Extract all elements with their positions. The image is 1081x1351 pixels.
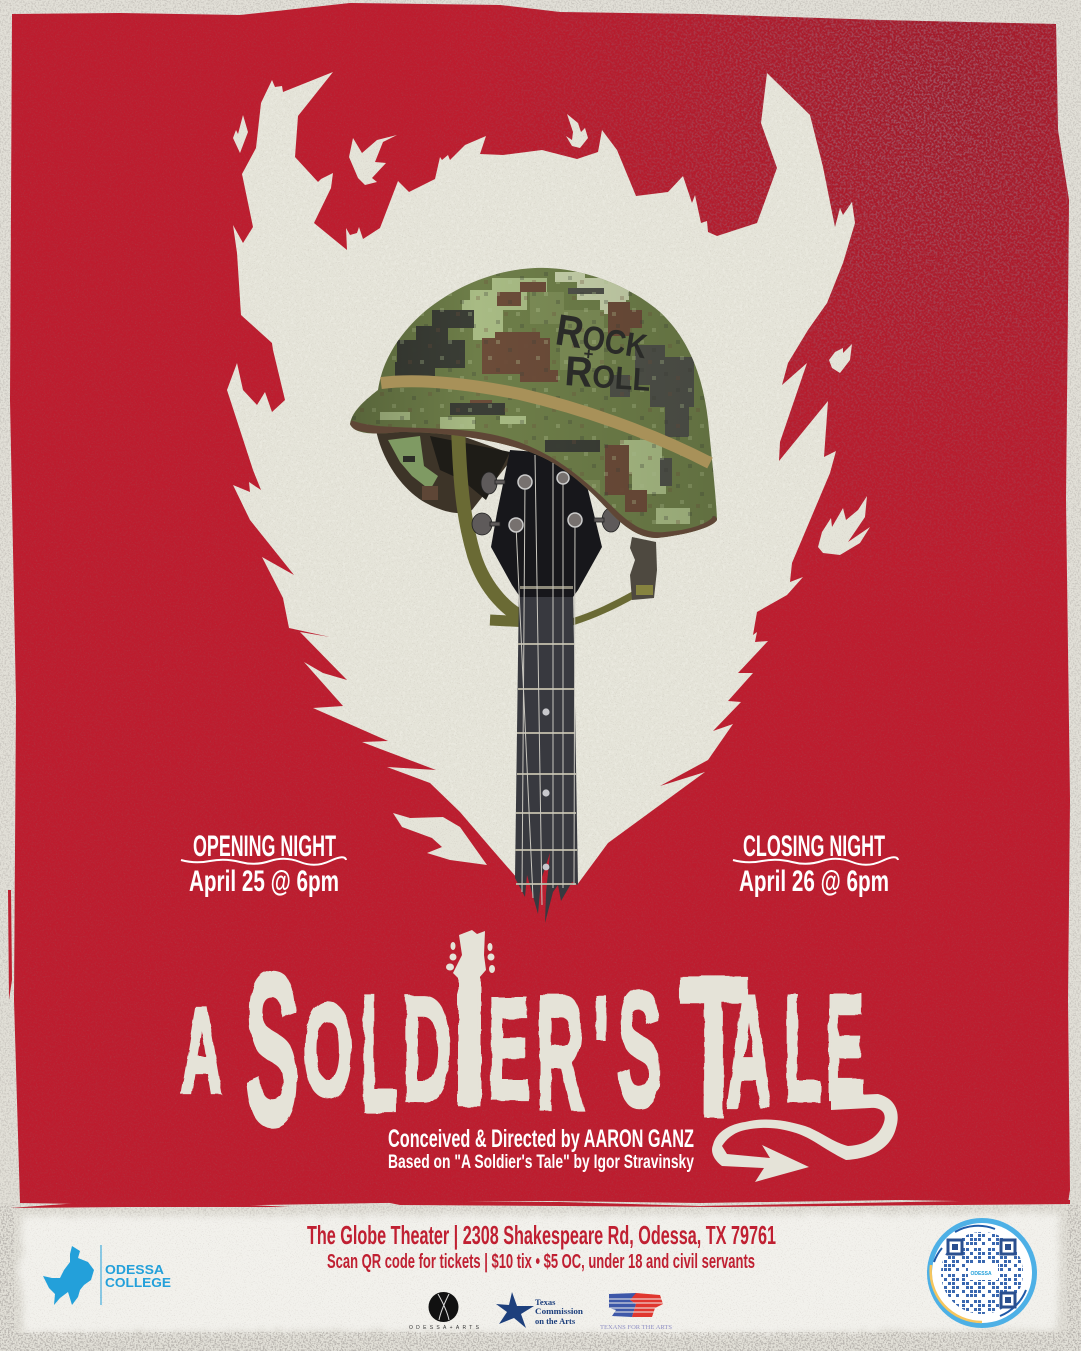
title [181,929,864,1169]
helmet shell [350,268,717,538]
helmet rim [350,424,717,536]
title: L [784,965,820,1133]
logo: Texas Commission on the Arts: Commission [535,1306,583,1316]
navy ring segments [934,1226,1026,1316]
opening night block: April 25 @ 6pm [189,865,339,898]
footer right wear [1067,1205,1081,1335]
title: I [451,941,488,1144]
title: D [402,968,452,1132]
closing night block: April 26 @ 6pm [739,865,889,898]
logo: Odessa College: ODESSA [105,1262,165,1277]
logo: Texas Commission on the Arts: on the Arts [535,1316,576,1326]
QR centre text: ODESSA [970,1271,992,1277]
footer bottom wear [0,1332,1081,1351]
gold ring segment [931,1265,982,1322]
QR finder squares [948,1240,1015,1307]
logo: Texans for the Arts: TEXANS FOR THE ARTS [600,1324,672,1331]
QR centre logo [968,1264,998,1280]
credits [388,1125,694,1173]
frets [515,643,577,885]
headstock nut [520,586,573,589]
title: A [726,963,772,1140]
tuning pegs [472,472,620,535]
credits: Based on "A Soldier's Tale" by Igor Stravinsky [388,1152,694,1173]
venue details [307,1220,776,1273]
logo: Texas Commission on the Arts: Texas [535,1297,556,1307]
title: E [826,964,864,1130]
logo: Texans for the Arts [600,1293,672,1331]
logo: Texas Commission on the Arts [496,1292,583,1328]
helmet [350,268,717,538]
red field shading [645,14,1069,396]
title: O [304,978,352,1123]
camouflage pattern [350,272,717,538]
guitar [472,450,620,923]
flame shaped paper burst [227,72,870,885]
title: E [488,970,530,1129]
logo: Odessa College [43,1245,171,1305]
helmet underside [376,428,515,513]
red field grunge [476,5,1069,564]
Rock and Roll marking: ROLL [563,347,652,400]
tuner posts [509,472,582,532]
title: ' [594,964,608,1142]
logo: Odessa Arts: ODESSA+ARTS [409,1325,480,1331]
venue details: The Globe Theater | 2308 Shakespeare Rd, Odessa, TX 79761 [307,1220,776,1250]
closing night block: CLOSING NIGHT [743,830,885,863]
title: T [680,937,747,1158]
title: S [618,959,661,1140]
footer left wear [0,1205,14,1335]
strings [516,455,575,905]
Rock and Roll marking: ROCK [552,305,651,368]
title: A [181,983,222,1118]
title: R [536,964,584,1143]
helmet shading [350,272,717,532]
Rock and Roll marking: + [583,344,595,364]
helmet band [381,381,710,463]
QR finder centres [952,1244,1011,1303]
icon: guitar headstock over the I [446,930,495,995]
closing night block [733,830,898,898]
title: S [245,929,299,1169]
strap buckle [630,537,657,600]
QR modules [941,1232,1023,1314]
headstock [491,450,602,597]
chin straps [458,425,635,622]
QR code badge [927,1218,1037,1328]
Rock and Roll marking [552,305,652,400]
paper highlights [227,74,852,875]
logo: Odessa College: COLLEGE [105,1275,171,1290]
fret markers [542,708,550,870]
devil tail [712,1094,898,1182]
logo: Odessa Arts [409,1292,480,1331]
guitar neck [515,585,578,923]
opening night block: OPENING NIGHT [193,830,336,863]
footer paper strip [20,1214,1060,1334]
opening night block [181,830,346,898]
credits: Conceived & Directed by AARON GANZ [388,1125,694,1153]
venue details: Scan QR code for tickets | $10 tix • $5 OC, under 18 and civil servants [327,1251,755,1273]
title: L [361,962,397,1146]
camo pixel breakup [352,272,716,535]
